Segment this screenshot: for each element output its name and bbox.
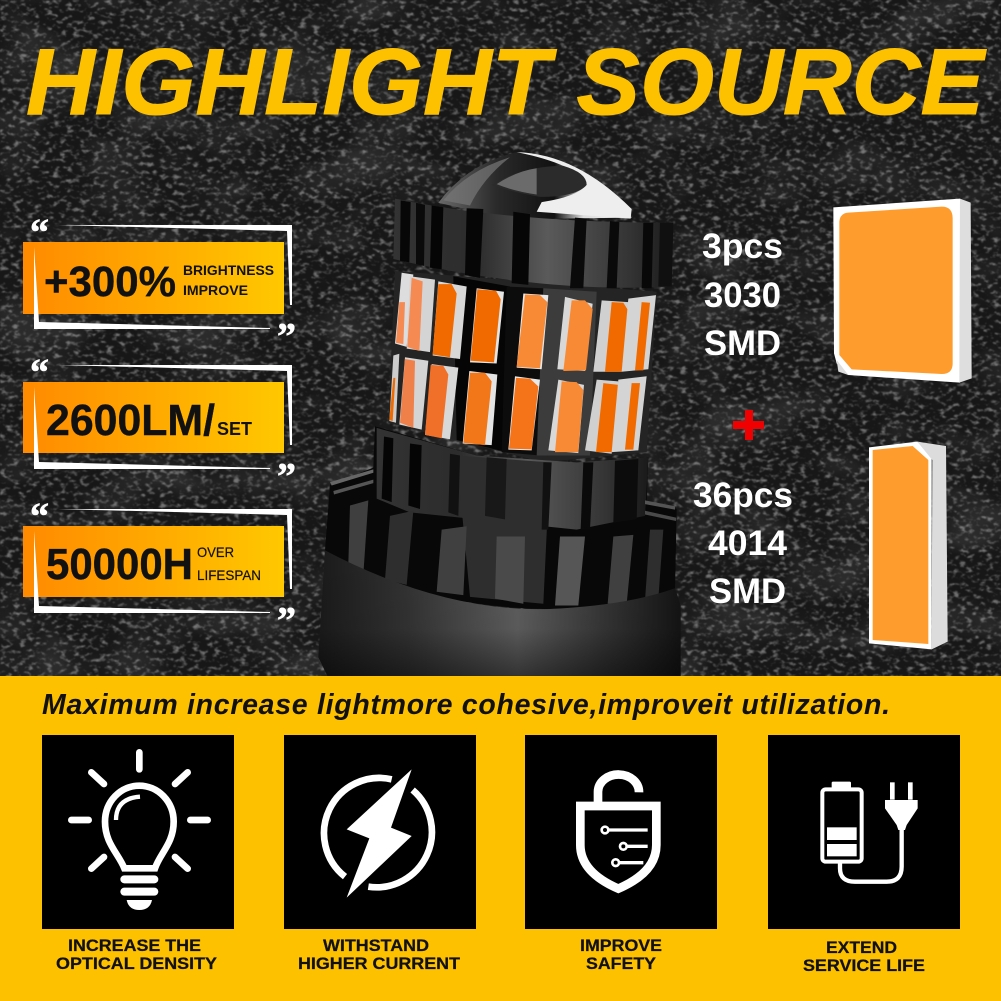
- caption: SERVICE LIFE: [803, 956, 925, 975]
- specs: 3030 SMD: 3030: [704, 276, 781, 315]
- LED column: [388, 271, 657, 462]
- panel: improve safety: [525, 735, 717, 973]
- specs: 4014 SMD: 4014: [708, 524, 788, 563]
- panel: service life: [768, 735, 960, 975]
- icon: 4014 LED chip: [869, 442, 948, 649]
- top heat-sink ring: [393, 199, 673, 288]
- icon: shield lock: [580, 775, 656, 889]
- specs: 4014 SMD: 36pcs: [693, 476, 793, 515]
- subheading: Maximum increase lightmore cohesive,improveit utilization.: [42, 689, 890, 721]
- value: +300%: [44, 258, 176, 306]
- yellow lower band: [0, 676, 1001, 1001]
- lower heat-sink fins: [325, 426, 677, 609]
- label: LIFESPAN: [197, 567, 261, 583]
- LED chips upper row: [395, 273, 656, 372]
- icon tile: [284, 735, 476, 929]
- value: 50000H: [46, 540, 193, 589]
- caption: [803, 938, 925, 975]
- label: OVER: [197, 544, 234, 560]
- icon: light bulb: [71, 752, 208, 910]
- LED chips lower row: [389, 354, 647, 454]
- panel: optical density: [42, 735, 234, 973]
- panel: stat lumens: [23, 352, 296, 498]
- specs: 4014 SMD: [693, 476, 793, 611]
- label: [197, 544, 261, 583]
- caption: [56, 936, 218, 973]
- caption: INCREASE THE: [68, 936, 201, 955]
- lifespan frame: [34, 509, 292, 613]
- caption: WITHSTAND: [323, 936, 429, 955]
- opening quote: “: [30, 352, 49, 394]
- quote bar: [23, 242, 284, 314]
- opening quote: “: [30, 496, 49, 538]
- plus sign: [733, 410, 764, 440]
- lumens bar: [23, 382, 284, 453]
- icon tile: [768, 735, 960, 929]
- base cylinder: [318, 550, 681, 681]
- label: [183, 262, 274, 298]
- corner frame: [34, 225, 292, 329]
- lifespan bar: [23, 526, 284, 597]
- panel: stat lifespan: [23, 496, 296, 642]
- title: HIGHLIGHT SOURCE: [26, 29, 987, 134]
- caption: [580, 936, 662, 973]
- caption: IMPROVE: [580, 936, 662, 955]
- caption: EXTEND: [826, 938, 897, 957]
- label: BRIGHTNESS: [183, 262, 274, 278]
- closing quote: ”: [277, 316, 296, 358]
- caption: SAFETY: [586, 954, 657, 973]
- caption: [298, 936, 461, 973]
- panel: higher current: [284, 735, 476, 973]
- icon: 3030 LED chip: [833, 199, 972, 383]
- caption: OPTICAL DENSITY: [56, 954, 218, 973]
- value: 2600LM/: [46, 396, 215, 445]
- textured dark background: [0, 0, 1001, 680]
- caption: HIGHER CURRENT: [298, 954, 461, 973]
- icon tile: [42, 735, 234, 929]
- icon tile: [525, 735, 717, 929]
- icon: battery and plug: [822, 782, 918, 882]
- specs: 3030 SMD: [702, 227, 783, 363]
- specs: 3030 SMD: 3pcs: [702, 227, 783, 266]
- closing quote: ”: [277, 456, 296, 498]
- specs: 3030 SMD: SMD: [704, 324, 781, 363]
- unit: SET: [217, 419, 252, 439]
- icon: lightning circle: [324, 769, 432, 898]
- label: IMPROVE: [183, 282, 248, 298]
- panel: stat brightness: [23, 212, 296, 358]
- opening quote: “: [30, 212, 49, 254]
- specs: 4014 SMD: SMD: [709, 572, 786, 611]
- closing quote: ”: [277, 600, 296, 642]
- lumens frame: [34, 365, 292, 469]
- product: LED bulb: [318, 152, 681, 681]
- lens dome: [438, 152, 632, 219]
